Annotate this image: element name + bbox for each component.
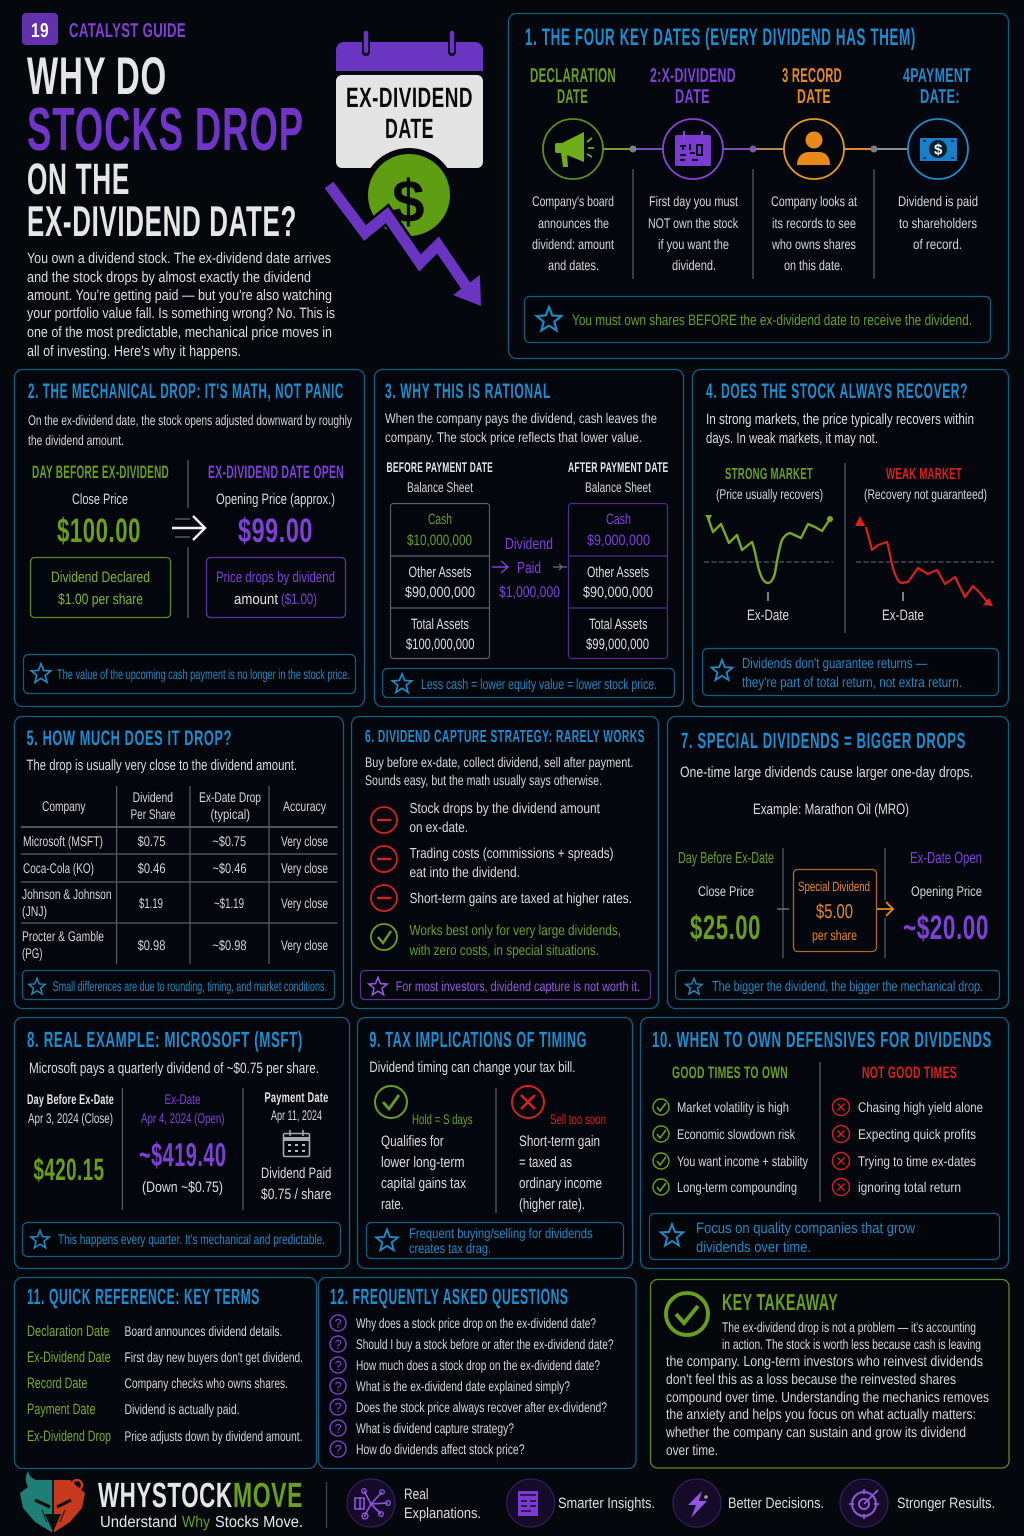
balance sheet before — [386, 459, 493, 658]
balance sheet after: Other Assets — [587, 564, 649, 581]
panel: 1 the four key dates — [508, 14, 1008, 358]
question list: ? — [334, 1316, 342, 1331]
date descriptions: announces the — [538, 215, 609, 231]
callout: less cash — [382, 668, 674, 698]
balance sheet before: Total Assets — [411, 616, 469, 633]
table: dividend vs drop: Per Share — [130, 806, 176, 822]
balance sheet before: Cash — [428, 511, 452, 528]
column: hold — [375, 1086, 473, 1213]
chart: strong market: STRONG MARKET — [725, 466, 813, 483]
table: dividend vs drop: Accuracy — [283, 798, 326, 814]
divider — [819, 1062, 821, 1202]
callout: bigger dividend — [676, 970, 1000, 1000]
chart: strong market: (Price usually recovers) — [716, 486, 823, 502]
chart: weak market: Ex-Date — [882, 607, 924, 624]
question list: What is dividend capture strategy? — [356, 1420, 514, 1436]
point: stock drops: on ex-date. — [410, 820, 468, 836]
date descriptions: of record. — [913, 236, 962, 252]
list: not good times: Chasing high yield alone — [858, 1099, 983, 1115]
icon: ex-dividend calendar with coin and falling arrow — [329, 33, 483, 306]
takeaway text: don't feel this as a loss because the reinvested shares — [666, 1372, 956, 1388]
footer item: real explanations — [347, 1479, 481, 1527]
footer item: smarter insights — [507, 1479, 655, 1527]
callout: quality companies: Focus on quality companies that grow — [696, 1220, 915, 1237]
point: works best: Works best only for very large dividends, — [410, 923, 621, 939]
balance sheet before: Balance Sheet — [407, 479, 473, 495]
table: dividend vs drop: Johnson & Johnson — [22, 886, 112, 902]
column: ex-dividend date open: $99.00 — [238, 512, 313, 550]
description — [365, 754, 633, 788]
intro paragraph: You own a dividend stock. The ex-dividend date arrives — [27, 250, 331, 267]
balance sheet before: $90,000,000 — [405, 584, 475, 601]
column: hold: rate. — [381, 1196, 404, 1213]
date labels: DECLARATION — [530, 65, 616, 87]
icon: banknote: $ — [934, 142, 943, 158]
heading: key takeaway: KEY TAKEAWAY — [722, 1289, 838, 1315]
date descriptions: dividend: amount — [532, 236, 614, 252]
balance sheet before: $100,000,000 — [406, 636, 474, 653]
date labels: DATE — [797, 86, 831, 108]
intro paragraph: and the stock drops by almost exactly the dividend — [27, 269, 311, 286]
intro paragraph: your portfolio value fall. Is something wrong? No. This is — [27, 305, 335, 322]
heading: microsoft: 8. REAL EXAMPLE: MICROSOFT (MSFT) — [27, 1027, 303, 1052]
panel: 9 tax implications — [358, 1018, 632, 1268]
date descriptions: to shareholders — [899, 215, 977, 231]
panel: 5 how much does it drop — [14, 716, 344, 1008]
callout: upcoming payment: The value of the upcoming cash payment is no longer in the stock price. — [57, 666, 350, 682]
question list: Why does a stock price drop on the ex-dividend date? — [356, 1315, 596, 1331]
icon: check — [666, 1293, 708, 1335]
heading: capture: 6. DIVIDEND CAPTURE STRATEGY: RARELY WORKS — [365, 726, 645, 746]
column: ex-date: ~$419.40 — [139, 1136, 226, 1173]
terms list — [27, 1323, 303, 1445]
icon: megaphone — [543, 119, 603, 179]
footer: brand wordmark: WHYSTOCK — [98, 1476, 233, 1515]
column: day before — [27, 1091, 114, 1187]
table: dividend vs drop: Very close — [281, 895, 328, 911]
description: company. The stock price reflects that lower value. — [385, 429, 642, 445]
point: trading costs: Trading costs (commissions + spreads) — [410, 846, 614, 862]
question list: ? — [334, 1442, 342, 1457]
balance sheet after: AFTER PAYMENT DATE — [568, 459, 668, 475]
list: not good times: ignoring total return — [858, 1179, 961, 1195]
footer: brand wordmark: Stocks Move. — [215, 1514, 303, 1531]
icon: ex-dividend calendar with coin and falling arrow: DATE — [385, 113, 434, 144]
table: dividend vs drop: (JNJ) — [22, 903, 47, 919]
table: dividend vs drop: Coca-Cola (KO) — [23, 860, 94, 876]
question list: How do dividends affect stock price? — [356, 1441, 525, 1457]
column: payment date: Payment Date — [264, 1089, 328, 1105]
column: day before ex-dividend — [30, 462, 170, 618]
point: short-term gains — [371, 885, 632, 911]
terms list: Dividend is actually paid. — [124, 1401, 240, 1417]
terms list: Record Date — [27, 1375, 87, 1392]
balance sheet after: Total Assets — [589, 616, 648, 633]
column: ex-date open: Opening Price — [911, 883, 982, 899]
column: sell too soon — [512, 1086, 606, 1213]
column: day before: Apr 3, 2024 (Close) — [28, 1110, 113, 1126]
date descriptions: if you want the — [658, 236, 729, 252]
question list: Does the stock price always recover after ex-dividend? — [356, 1399, 607, 1415]
list: not good times: NOT GOOD TIMES — [862, 1064, 957, 1082]
column: day before ex-dividend: Dividend Declared — [51, 569, 150, 586]
column: day before ex-dividend: DAY BEFORE EX-DIVIDEND — [32, 462, 169, 482]
list: not good times: Trying to time ex-dates — [858, 1153, 976, 1169]
date descriptions: and dates. — [548, 257, 599, 273]
balance sheet before: BEFORE PAYMENT DATE — [386, 459, 493, 475]
callout: total return: Dividends don't guarantee returns — — [742, 656, 927, 672]
table: dividend vs drop: (PG) — [22, 945, 42, 961]
column: ex-date — [122, 1088, 243, 1210]
header: badge and eyebrow — [22, 13, 186, 45]
column: sell too soon: = taxed as — [519, 1154, 572, 1171]
panel: 8 real example microsoft — [14, 1018, 350, 1268]
question list: ? — [334, 1358, 342, 1373]
date descriptions: dividend. — [672, 257, 716, 273]
question list: What is the ex-dividend date explained simply? — [356, 1378, 570, 1394]
description: Example: Marathon Oil (MRO) — [753, 801, 909, 818]
point: works best: with zero costs, in special situations. — [409, 943, 599, 959]
callout: total return: they're part of total return, not extra return. — [742, 675, 962, 691]
column: day before: Day Before Ex-Date — [27, 1091, 114, 1107]
heading: faq: 12. FREQUENTLY ASKED QUESTIONS — [330, 1284, 569, 1309]
description: Dividend timing can change your tax bill. — [369, 1059, 575, 1076]
chart: weak market — [855, 466, 994, 624]
list: good times: You want income + stability — [677, 1153, 808, 1169]
list: not good times — [832, 1064, 983, 1196]
date descriptions: First day you must — [649, 193, 738, 209]
title: ON THE — [27, 155, 130, 204]
date descriptions — [532, 169, 978, 279]
column: ex-dividend date open: EX-DIVIDEND DATE OPEN — [208, 462, 344, 482]
callout: total return — [702, 648, 998, 696]
table: dividend vs drop: ~$0.46 — [212, 860, 247, 876]
column: day before ex-date — [678, 850, 774, 947]
chart: weak market: WEAK MARKET — [886, 466, 962, 483]
terms list: Board announces dividend details. — [124, 1323, 282, 1339]
panel: 10 when to own defensives — [640, 1018, 1008, 1268]
date descriptions: on this date. — [784, 257, 843, 273]
icon: ex-dividend calendar with coin and falling arrow: $ — [392, 168, 426, 235]
footer: brand wordmark: Understand — [100, 1514, 177, 1531]
callout: small differences — [22, 970, 334, 1000]
balance sheet after: $9,000,000 — [587, 532, 650, 549]
special dividend box: $5.00 — [816, 901, 853, 923]
chart: strong market — [704, 466, 833, 624]
callout: not worth it: For most investors, dividend capture is not worth it. — [396, 978, 640, 994]
table: dividend vs drop: $1.19 — [139, 895, 163, 911]
column: ex-dividend date open: Price drops by dividend — [216, 569, 335, 586]
footer divider — [326, 1482, 328, 1528]
list: good times: Economic slowdown risk — [677, 1126, 796, 1142]
table: dividend vs drop — [21, 786, 338, 964]
date descriptions: Dividend is paid — [898, 193, 978, 209]
icon: person — [784, 119, 844, 179]
callout: own before ex-date — [524, 296, 990, 342]
callout: not worth it — [360, 970, 650, 1000]
table: dividend vs drop: Very close — [281, 833, 328, 849]
column: day before ex-date: Close Price — [698, 883, 754, 899]
footer item: smarter insights: Smarter Insights. — [558, 1495, 655, 1512]
date labels: 4PAYMENT — [903, 65, 971, 87]
callout: upcoming payment — [24, 654, 356, 694]
column: day before ex-dividend: Close Price — [72, 491, 128, 508]
balance sheet after: Balance Sheet — [585, 479, 651, 495]
point: short-term gains: Short-term gains are taxed at higher rates. — [410, 891, 632, 907]
balance sheet before: $10,000,000 — [407, 532, 472, 549]
footer: brand wordmark: MOVE — [233, 1476, 303, 1515]
description: days. In weak markets, it may not. — [706, 430, 878, 447]
question list: ? — [334, 1400, 342, 1415]
column: ex-date: Apr 4, 2024 (Open) — [141, 1110, 224, 1126]
terms list: First day new buyers don't get dividend. — [124, 1349, 303, 1365]
description: Sounds easy, but the math usually says otherwise. — [365, 772, 602, 788]
table: dividend vs drop: Company — [42, 798, 86, 814]
heading: mechanical drop: 2. THE MECHANICAL DROP: IT'S MATH, NOT PANIC — [28, 380, 344, 403]
column: ex-date open — [903, 850, 989, 947]
table: dividend vs drop: ~$0.75 — [212, 833, 246, 849]
table: dividend vs drop: $0.46 — [138, 860, 166, 876]
intro paragraph — [27, 250, 335, 360]
column: sell too soon: Sell too soon — [550, 1111, 606, 1127]
column: day before ex-dividend: $1.00 per share — [58, 591, 143, 608]
table: dividend vs drop: Ex-Date Drop — [199, 789, 261, 805]
list: good times: Long-term compounding — [677, 1179, 797, 1195]
description — [28, 412, 352, 448]
point: stock drops — [371, 801, 600, 836]
panel: 3 why this is rational — [374, 370, 684, 706]
column: hold: capital gains tax — [381, 1175, 466, 1192]
panel: 4 does the stock always recover — [692, 370, 1008, 706]
heading: how much: 5. HOW MUCH DOES IT DROP? — [26, 727, 232, 750]
terms list: Payment Date — [27, 1401, 96, 1418]
date descriptions: who owns shares — [771, 236, 856, 252]
panel: 7 special dividends — [668, 716, 1008, 1008]
balance sheet after: $90,000,000 — [583, 584, 653, 601]
balance sheet before: Other Assets — [408, 564, 472, 581]
terms list: Price adjusts down by dividend amount. — [124, 1428, 302, 1444]
balance sheet after — [568, 459, 668, 658]
table: dividend vs drop: ~$0.98 — [212, 937, 247, 953]
footer: brand wordmark: Why — [182, 1514, 210, 1531]
list: good times: GOOD TIMES TO OWN — [672, 1064, 788, 1082]
date labels: DATE — [675, 86, 710, 108]
divider — [495, 1088, 497, 1213]
timeline connectors — [603, 146, 908, 152]
panel: 6 dividend capture strategy — [352, 716, 658, 1008]
callout: tax drag: creates tax drag. — [409, 1240, 491, 1256]
description — [680, 764, 973, 818]
panel: key takeaway — [650, 1280, 1009, 1468]
list: not good times: Expecting quick profits — [858, 1126, 976, 1142]
terms list: Ex-Dividend Drop — [27, 1428, 111, 1445]
terms list: Company checks who owns shares. — [124, 1375, 288, 1391]
description: The drop is usually very close to the dividend amount. — [26, 757, 297, 774]
dividend paid flow: $1,000,000 — [499, 584, 560, 601]
column: hold: lower long-term — [381, 1154, 464, 1171]
column: day before ex-date: Day Before Ex-Date — [678, 850, 774, 867]
callout: quality companies: dividends over time. — [696, 1239, 811, 1256]
column: day before ex-date: $25.00 — [690, 909, 761, 947]
terms list: Ex-Dividend Date — [27, 1349, 111, 1366]
column: ex-dividend date open — [188, 460, 346, 618]
header: badge and eyebrow: CATALYST GUIDE — [69, 20, 186, 42]
column: sell too soon: ordinary income — [519, 1175, 602, 1192]
point: trading costs — [371, 846, 614, 881]
question list: ? — [334, 1337, 342, 1352]
table: dividend vs drop: Procter & Gamble — [22, 928, 104, 944]
callout: small differences: Small differences are due to rounding, timing, and market conditions. — [53, 978, 327, 994]
chart: strong market: Ex-Date — [747, 607, 789, 624]
takeaway text: whether the company can sustain and grow its dividend — [665, 1425, 966, 1441]
column: sell too soon: (higher rate). — [519, 1196, 585, 1213]
heading: rational: 3. WHY THIS IS RATIONAL — [385, 380, 551, 403]
footer item: real explanations: Real — [404, 1486, 429, 1503]
column: sell too soon: Short-term gain — [519, 1133, 600, 1150]
table: dividend vs drop: $0.75 — [138, 833, 166, 849]
question list: Should I buy a stock before or after the ex-dividend date? — [356, 1336, 614, 1352]
date labels: 2:X-DIVIDEND — [650, 65, 736, 87]
special dividend box — [777, 848, 893, 958]
balance sheet after: Cash — [606, 511, 631, 528]
intro paragraph: amount. You're getting paid — but you're also watching — [27, 287, 332, 304]
column: day before: $420.15 — [34, 1152, 104, 1187]
intro paragraph: one of the most predictable, mechanical price moves in — [27, 324, 332, 341]
column: hold: Qualifies for — [381, 1133, 444, 1150]
date descriptions: Company looks at — [771, 193, 857, 209]
date labels: 3 RECORD — [782, 65, 842, 87]
divider — [844, 463, 846, 633]
description: When the company pays the dividend, cash leaves the — [385, 410, 657, 426]
column: ex-dividend date open: Opening Price (approx.) — [216, 491, 335, 508]
special dividend box: per share — [812, 927, 857, 943]
heading: key terms: 11. QUICK REFERENCE: KEY TERMS — [27, 1284, 260, 1309]
panel: 12 frequently asked questions — [318, 1278, 636, 1468]
table: dividend vs drop: (typical) — [210, 806, 250, 822]
table: dividend vs drop: ~$1.19 — [214, 895, 244, 911]
column: ex-date: (Down ~$0.75) — [142, 1179, 223, 1196]
column: ex-date open: Ex-Date Open — [910, 850, 982, 867]
footer item: stronger results — [840, 1479, 995, 1527]
date labels: DATE: — [920, 86, 960, 108]
callout: every quarter — [22, 1222, 340, 1256]
panel: 11 quick reference — [14, 1278, 316, 1468]
column: payment date — [261, 1089, 331, 1203]
point: trading costs: eat into the dividend. — [410, 865, 520, 881]
special dividend box: Special Dividend — [798, 879, 870, 894]
question list: How much does a stock drop on the ex-dividend date? — [356, 1357, 600, 1373]
title — [27, 47, 304, 246]
callout: tax drag — [366, 1222, 624, 1258]
table: dividend vs drop: Very close — [281, 860, 328, 876]
table: dividend vs drop: $0.98 — [138, 937, 166, 953]
footer item: real explanations: Explanations. — [404, 1505, 481, 1522]
description: Microsoft pays a quarterly dividend of ~$0.75 per share. — [29, 1060, 319, 1077]
point: works best — [371, 923, 621, 959]
point: stock drops: Stock drops by the dividend amount — [410, 801, 600, 817]
heading: tax: 9. TAX IMPLICATIONS OF TIMING — [369, 1027, 587, 1052]
column: ex-dividend date open: ($1.00) — [281, 591, 317, 608]
date labels: DATE — [557, 86, 588, 108]
question list: ? — [334, 1379, 342, 1394]
title: STOCKS DROP — [27, 95, 304, 163]
takeaway text: over time. — [666, 1443, 718, 1459]
dividend paid flow: Dividend — [505, 536, 553, 553]
terms list: Declaration Date — [27, 1323, 109, 1340]
date descriptions: NOT own the stock — [648, 215, 739, 231]
takeaway text: the anxiety and helps you focus on what actually matters: — [666, 1407, 976, 1423]
date descriptions: Company's board — [532, 193, 614, 209]
date descriptions: its records to see — [772, 215, 856, 231]
description — [706, 411, 974, 447]
icon: banknote — [908, 119, 968, 179]
description — [385, 410, 657, 445]
footer item: stronger results: Stronger Results. — [897, 1495, 995, 1512]
header: badge and eyebrow: 19 — [31, 20, 49, 42]
column: hold: Hold = S days — [412, 1111, 473, 1127]
column: payment date: Apr 11, 2024 — [271, 1107, 322, 1123]
column: day before ex-dividend: $100.00 — [57, 512, 141, 550]
table: dividend vs drop: Dividend — [133, 789, 173, 805]
balance sheet after: $99,000,000 — [586, 636, 649, 653]
footer item: better decisions: Better Decisions. — [728, 1495, 824, 1512]
panel: 2 the mechanical drop — [14, 370, 364, 706]
question list — [330, 1315, 614, 1457]
arrow: before to after — [172, 516, 205, 540]
column: payment date: $0.75 / share — [261, 1186, 331, 1203]
dividend paid flow — [492, 536, 567, 601]
table: dividend vs drop: Very close — [281, 937, 328, 953]
description: Buy before ex-date, collect dividend, sell after payment. — [365, 754, 633, 770]
description: the dividend amount. — [28, 432, 124, 448]
question list: ? — [334, 1421, 342, 1436]
title: EX-DIVIDEND DATE? — [27, 198, 297, 246]
date labels — [530, 65, 971, 108]
icon: ex-dividend calendar with coin and falling arrow: EX-DIVIDEND — [346, 82, 473, 113]
callout: every quarter: This happens every quarter. It's mechanical and predictable. — [58, 1231, 325, 1247]
column: ex-dividend date open: amount — [234, 591, 279, 608]
takeaway text: the company. Long-term investors who reinvest dividends — [666, 1354, 983, 1370]
callout: tax drag: Frequent buying/selling for dividends — [409, 1225, 593, 1241]
callout: quality companies — [650, 1214, 1000, 1260]
footer: brand wordmark — [98, 1476, 303, 1531]
title: WHY DO — [27, 47, 167, 106]
takeaway text — [665, 1319, 989, 1459]
column: ex-date: Ex-Date — [164, 1091, 201, 1107]
list: good times — [653, 1064, 808, 1195]
icon: calendar — [663, 119, 723, 179]
intro paragraph: all of investing. Here's why it happens. — [27, 343, 241, 360]
dividend paid flow: Paid — [517, 560, 541, 577]
list: good times: Market volatility is high — [677, 1099, 789, 1115]
callout: less cash: Less cash = lower equity value = lower stock price. — [421, 677, 657, 693]
footer item: better decisions — [673, 1479, 824, 1527]
footer: bull and bear logo — [20, 1471, 85, 1533]
table: dividend vs drop: Microsoft (MSFT) — [23, 833, 103, 849]
description: On the ex-dividend date, the stock opens adjusted downward by roughly — [28, 412, 352, 428]
column: payment date: Dividend Paid — [261, 1165, 331, 1182]
